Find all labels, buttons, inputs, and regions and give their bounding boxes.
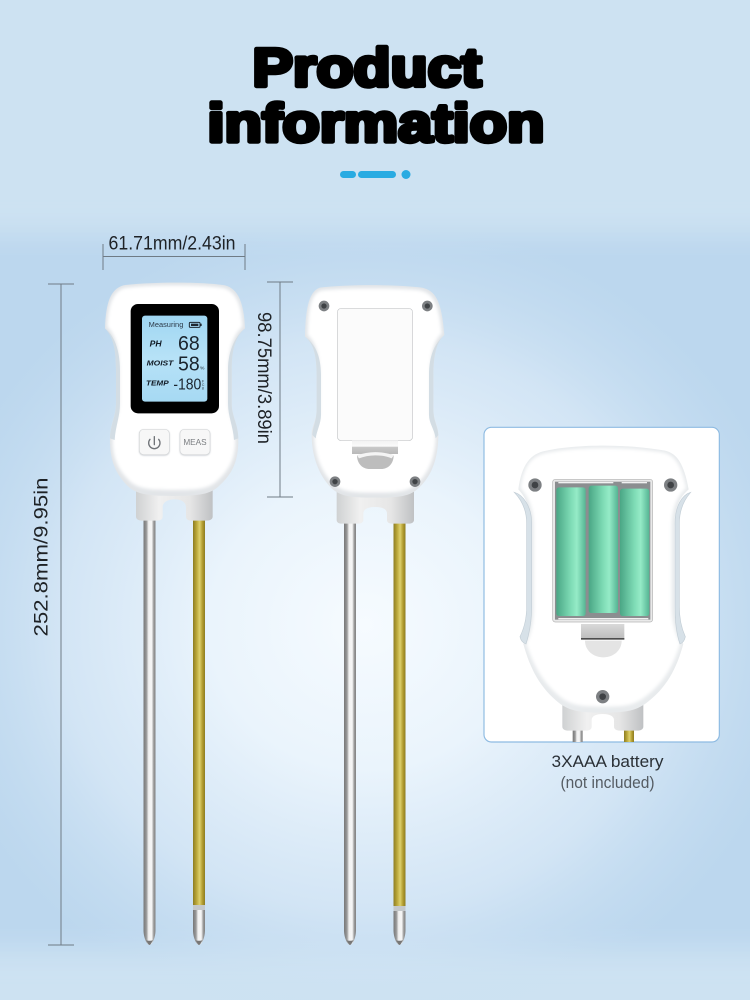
battery compartment xyxy=(553,479,653,622)
width dimension xyxy=(103,234,245,270)
lcd screen: F xyxy=(202,380,204,384)
body height dimension xyxy=(253,282,293,497)
lcd screen: C xyxy=(202,383,205,387)
battery panel xyxy=(484,427,719,743)
battery contacts xyxy=(558,482,648,619)
lcd screen: MOIST xyxy=(147,358,175,367)
width dimension: 61.71mm/2.43in xyxy=(108,234,236,254)
inset side grips xyxy=(514,492,691,644)
side grips xyxy=(305,335,444,438)
power button xyxy=(139,429,169,455)
front probes xyxy=(144,518,205,945)
lcd screen: 58 xyxy=(178,353,200,375)
lcd screen: 8 xyxy=(202,386,204,390)
inset connectors xyxy=(562,703,643,731)
battery caption xyxy=(552,752,664,792)
device body xyxy=(305,285,444,498)
side grips xyxy=(105,328,245,440)
back probes xyxy=(344,518,406,945)
cover latch xyxy=(352,441,398,469)
gold probe xyxy=(394,518,406,945)
title: Product xyxy=(252,38,482,98)
battery caption: 3XAAA battery xyxy=(552,752,664,771)
inset device body xyxy=(518,446,689,713)
lcd screen: Measuring xyxy=(149,320,183,329)
batteries xyxy=(556,486,649,616)
lcd screen: TEMP xyxy=(146,378,170,387)
battery cover xyxy=(337,308,413,441)
inset screws xyxy=(528,478,677,703)
front device xyxy=(105,283,245,521)
silver probe xyxy=(344,518,356,945)
lcd screen: PH xyxy=(150,339,162,349)
lcd screen: % xyxy=(200,365,205,371)
total height dimension xyxy=(32,284,74,945)
battery icon xyxy=(189,322,202,327)
lcd screen: -180 xyxy=(173,376,201,393)
total height dimension: 252.8mm/9.95in xyxy=(32,478,52,636)
title: information xyxy=(208,94,544,154)
device body xyxy=(105,283,245,496)
lcd screen xyxy=(142,316,207,402)
display bezel xyxy=(131,304,219,413)
screws xyxy=(319,301,433,487)
title accent bars xyxy=(340,170,410,179)
back device xyxy=(305,285,444,524)
compartment latch xyxy=(581,624,624,657)
body height dimension: 98.75mm/3.89in xyxy=(253,312,274,444)
inset probes xyxy=(572,730,634,742)
meas button: MEAS xyxy=(183,437,207,447)
battery caption: (not included) xyxy=(560,774,654,792)
gold probe xyxy=(193,518,205,945)
probe connectors xyxy=(337,492,414,524)
lcd screen: 68 xyxy=(178,333,200,355)
silver probe xyxy=(144,518,156,945)
probe connectors xyxy=(136,490,213,521)
meas button xyxy=(180,429,210,455)
title xyxy=(208,38,544,154)
